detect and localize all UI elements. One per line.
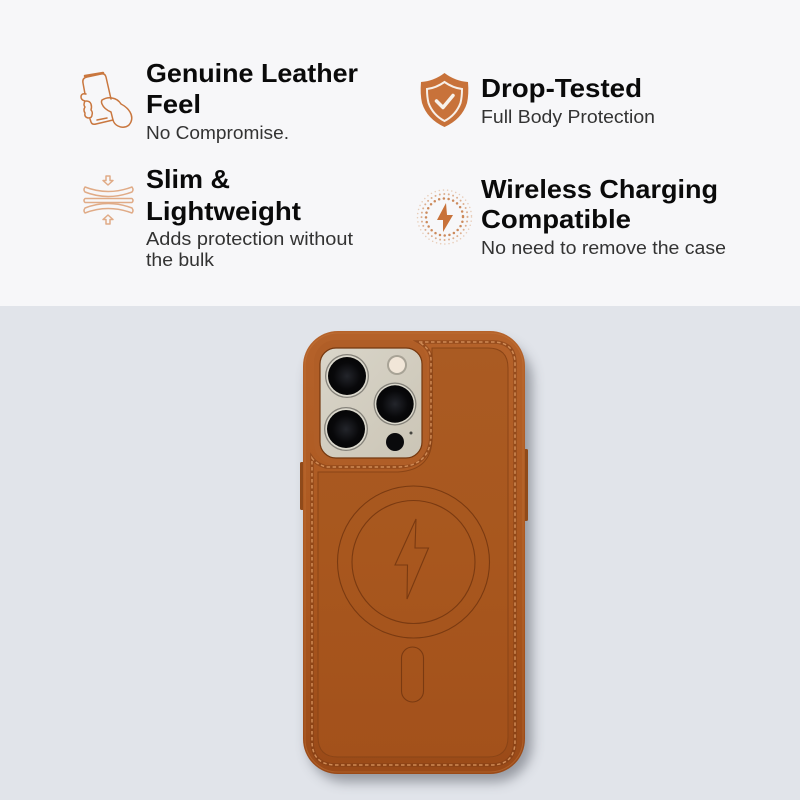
description: No Compromise. (146, 123, 289, 143)
icon: compression arrows and layers (84, 176, 133, 224)
lens: top (325, 354, 369, 398)
top features panel (0, 0, 800, 306)
feature: wireless charging (418, 174, 726, 258)
camera surround (314, 340, 427, 465)
stitching (312, 342, 515, 765)
description: Adds protection without (146, 229, 353, 249)
case body (303, 331, 525, 774)
phone in leather case (300, 331, 532, 782)
lens: bottom (324, 407, 368, 451)
lidar sensor (386, 433, 404, 451)
feature: slim and lightweight: the bulk (146, 250, 215, 270)
lens: right (374, 382, 416, 426)
description: No need to remove the case (481, 238, 726, 258)
flash (387, 355, 407, 375)
feature: wireless charging: Compatible (481, 204, 631, 234)
description: Full Body Protection (481, 107, 655, 127)
heading: Genuine Leather (146, 58, 358, 88)
heading: Slim & (146, 164, 230, 194)
icon: shield with check (421, 73, 468, 127)
side buttons (300, 449, 528, 521)
feature: drop-tested (421, 73, 655, 127)
leather back panel (318, 348, 508, 757)
camera plate (320, 348, 422, 458)
embossed charging ring (338, 486, 490, 702)
embossed oval (402, 647, 424, 702)
feature: genuine leather feel (81, 58, 358, 143)
embossed bolt (395, 519, 428, 599)
microphone dot (410, 432, 412, 434)
icon: hand holding phone (81, 73, 132, 127)
feature: slim and lightweight: Lightweight (146, 196, 301, 226)
heading: Wireless Charging (481, 174, 718, 204)
feature: genuine leather feel: Feel (146, 89, 201, 119)
case shadow (308, 342, 532, 782)
feature: slim and lightweight (84, 164, 353, 270)
icon: bolt within dotted rings (418, 190, 472, 244)
heading: Drop-Tested (481, 73, 642, 103)
bottom product panel (0, 306, 800, 800)
